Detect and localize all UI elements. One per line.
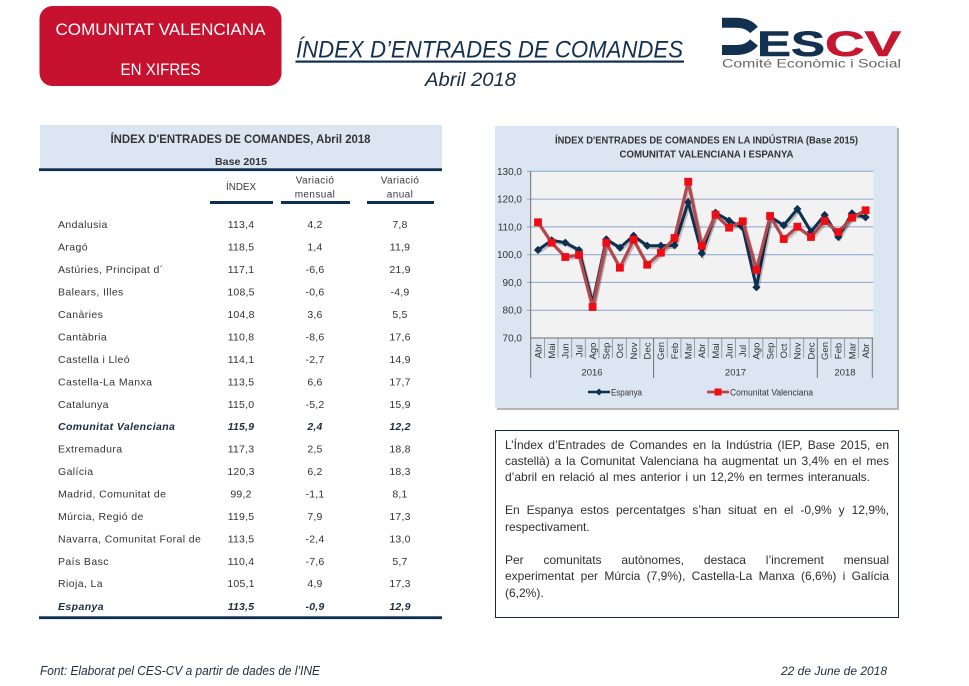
x axis month labels: Dec: [806, 342, 817, 359]
x axis month labels: Ago: [752, 343, 763, 359]
row: Comunitat Valenciana (highlighted): [58, 421, 411, 433]
row: Castella-La Manxa: [58, 376, 411, 388]
x axis month labels: Feb: [834, 343, 845, 359]
row: Rioja: 17,3: [389, 578, 411, 590]
y axis labels: 80,0: [503, 306, 522, 317]
row: Extremadura: 18,8: [389, 444, 411, 456]
row: Balears: 108,5: [227, 286, 255, 298]
x axis month labels: Jul: [574, 345, 585, 357]
row: Andalusia: 113,4: [228, 219, 254, 231]
row: Canàries: 5,5: [392, 309, 408, 321]
series: Comunitat Valenciana: [534, 178, 869, 310]
row: Catalunya: [58, 399, 411, 411]
row: Galícia: 120,3: [227, 466, 255, 478]
y axis labels: 100,0: [497, 250, 522, 261]
row: Espanya (highlighted): 12,9: [389, 601, 411, 613]
row: Múrcia: 7,9: [307, 511, 323, 523]
row: Madrid: 8,1: [392, 489, 408, 501]
x axis month labels: Ago: [588, 343, 599, 359]
row: Espanya (highlighted): [58, 601, 411, 613]
row: Madrid: Madrid, Comunitat de: [58, 489, 166, 501]
row: País Basc: 5,7: [392, 556, 408, 568]
row: Cantàbria: [58, 331, 411, 343]
badge: Comunitat Valenciana en xifres: EN XIFRES: [120, 61, 200, 79]
column headings: anual: [387, 190, 413, 200]
text box: commentary: respectivament.: [505, 520, 590, 534]
x axis month labels: Mai: [547, 343, 558, 359]
x axis month labels: Mar: [684, 343, 694, 359]
row: Navarra: 13,0: [389, 534, 411, 546]
x axis month labels: Mai: [711, 343, 722, 359]
row: Galícia: 6,2: [307, 466, 323, 478]
row: Rioja: 4,9: [307, 578, 323, 590]
row: Castella i Lleó: Castella i Lleó: [58, 354, 130, 366]
y axis labels: 70,0: [503, 334, 522, 344]
row: Astúries: 21,9: [389, 264, 411, 276]
row: Múrcia: Múrcia, Regió de: [58, 511, 144, 523]
row: Espanya (highlighted): Espanya: [58, 601, 104, 613]
row: Andalusia: 7,8: [392, 219, 408, 231]
panel: data table: [39, 125, 442, 619]
row: Andalusia: [58, 219, 408, 231]
row: Catalunya: 115,0: [228, 399, 254, 411]
row: Madrid: 99,2: [230, 489, 252, 501]
row: Múrcia: 17,3: [389, 511, 411, 523]
row: Aragó: Aragó: [58, 242, 88, 254]
row: Astúries: Astúries, Principat d´: [58, 264, 164, 276]
row: Comunitat Valenciana (highlighted): Comunitat Valenciana: [58, 421, 175, 433]
row: Andalusia: 4,2: [307, 219, 323, 231]
row: Castella-La Manxa: 6,6: [307, 376, 323, 388]
row: País Basc: País Basc: [58, 556, 109, 568]
x axis month labels: Abr: [861, 344, 872, 358]
row: Rioja: [58, 578, 411, 590]
row: Navarra: Navarra, Comunitat Foral de: [58, 534, 201, 546]
row: Astúries: -6,6: [306, 264, 324, 276]
column headings: ÍNDEX: [226, 180, 256, 193]
row: Catalunya: 15,9: [389, 399, 411, 411]
table header band: ÍNDEX D'ENTRADES DE COMANDES, Abril 2018: [110, 131, 371, 146]
text box: commentary: (6,2%).: [505, 586, 544, 600]
series: Espanya: [534, 199, 869, 305]
row: Navarra: 113,5: [228, 534, 254, 546]
row: Aragó: 1,4: [307, 242, 323, 254]
x axis month labels: Sep: [602, 343, 613, 359]
row: Madrid: -1,1: [306, 489, 324, 501]
text box: commentary: experimentat per Múrcia (7,9%), Castella-La Manxa (6,6%) i Galícia: [505, 569, 889, 583]
row: Castella i Lleó: 114,1: [228, 354, 254, 366]
y axis labels: 110,0: [498, 222, 522, 233]
y axis labels: [497, 167, 522, 344]
row: Rioja: Rioja, La: [58, 578, 103, 590]
footer: source: Font: Elaborat pel CES-CV a partir de dades de l’INE: [40, 664, 321, 678]
row: Castella-La Manxa: 113,5: [228, 376, 254, 388]
row: Balears: -0,6: [306, 286, 324, 298]
footer: date: 22 de June de 2018: [780, 664, 887, 678]
row: Comunitat Valenciana (highlighted): 12,2: [389, 421, 411, 433]
row: Comunitat Valenciana (highlighted): 2,4: [306, 421, 323, 433]
row: País Basc: -7,6: [306, 556, 324, 568]
text box: commentary: Per comunitats autònomes, destaca l’increment mensual: [505, 553, 889, 567]
chart title: [555, 134, 858, 160]
row: Espanya (highlighted): 113,5: [228, 601, 254, 613]
column headings: Variació: [296, 176, 334, 186]
x axis month labels: Oct: [615, 343, 626, 358]
row: Catalunya: -5,2: [306, 399, 324, 411]
row: Galícia: 18,3: [389, 466, 411, 478]
text box: commentary: d’abril en relació al mes anterior i un 12,2% en termes interanuals.: [505, 470, 870, 484]
row: Cantàbria: 17,6: [389, 331, 411, 343]
row: Múrcia: [58, 511, 411, 523]
row: Navarra: -2,4: [306, 534, 324, 546]
plot area: [527, 171, 873, 378]
x axis month labels: Feb: [670, 343, 681, 359]
row: Extremadura: 2,5: [307, 444, 323, 456]
x axis month labels: Sep: [765, 343, 776, 359]
legend: Comunitat Valenciana: Comunitat Valenciana: [730, 387, 814, 398]
row: Canàries: 104,8: [227, 309, 255, 321]
logo: CES CV: CV: [825, 25, 902, 64]
y axis labels: 130,0: [497, 167, 522, 178]
table header band: [39, 125, 442, 171]
row: Galícia: [58, 466, 411, 478]
badge: Comunitat Valenciana en xifres: COMUNITAT VALENCIANA: [56, 21, 266, 39]
x axis month labels: Nov: [793, 342, 804, 359]
legend: Espanya: Espanya: [611, 387, 643, 398]
row: Castella i Lleó: [58, 354, 411, 366]
table header band: Base 2015: [215, 157, 267, 168]
row: Cantàbria: 110,8: [228, 331, 254, 343]
x axis month labels: Jun: [724, 343, 735, 359]
x axis month labels: Oct: [779, 343, 790, 358]
text box: commentary: En Espanya estos percentatges s’han situat en el -0,9% y 12,9%,: [505, 503, 889, 517]
row: Galícia: Galícia: [58, 466, 93, 478]
row: Navarra: [58, 534, 411, 546]
row: Canàries: 3,6: [307, 309, 323, 321]
row: Castella i Lleó: 14,9: [389, 354, 411, 366]
text box: commentary: castellà) a la Comunitat Valenciana ha augmentat un 3,4% en el mes: [505, 454, 889, 468]
row: Madrid: [58, 489, 408, 501]
table bottom rule: [39, 616, 442, 619]
row: Aragó: 118,5: [228, 242, 254, 254]
text box: commentary: L’Índex d’Entrades de Comandes en la Indústria (IEP, Base 2015, en: [505, 438, 889, 452]
chart title: COMUNITAT VALENCIANA I ESPANYA: [620, 148, 794, 160]
badge: Comunitat Valenciana en xifres: [40, 6, 282, 86]
x axis year labels: 2018: [834, 368, 856, 378]
column headings: [210, 176, 434, 204]
x axis month labels: Abr: [697, 344, 708, 358]
column headings: Variació: [381, 176, 419, 186]
row: Astúries: 117,1: [228, 264, 254, 276]
row: Andalusia: Andalusia: [58, 219, 108, 231]
row: País Basc: 110,4: [228, 556, 254, 568]
row: Cantàbria: -8,6: [306, 331, 324, 343]
text box: commentary: [495, 430, 899, 618]
row: Balears: -4,9: [391, 286, 409, 298]
row: Aragó: 11,9: [390, 242, 410, 254]
x axis month labels: Dec: [642, 342, 654, 359]
row: Balears: [58, 286, 409, 298]
x axis month labels: Jun: [561, 343, 572, 359]
y axis labels: 90,0: [503, 278, 522, 289]
row: Aragó: [58, 242, 410, 254]
x axis month labels: Gen: [820, 342, 831, 360]
x axis month labels: Mar: [847, 343, 858, 359]
logo: CES CV: [722, 23, 902, 70]
row: Balears: Balears, Illes: [58, 286, 124, 298]
row: Canàries: Canàries: [58, 309, 103, 321]
row: País Basc: [58, 556, 408, 568]
logo: CES CV: ES: [757, 25, 825, 64]
row: Múrcia: 119,5: [228, 511, 254, 523]
legend: Espanya: [588, 387, 643, 398]
x axis month labels: [533, 342, 872, 360]
row: Extremadura: Extremadura: [58, 444, 123, 456]
x axis month labels: Jul: [738, 345, 749, 357]
row: Extremadura: 117,3: [228, 444, 254, 456]
row: Castella-La Manxa: 17,7: [389, 376, 411, 388]
y axis labels: 120,0: [497, 195, 522, 206]
x axis month labels: Gen: [656, 342, 667, 360]
x axis year labels: 2016: [581, 368, 603, 378]
row: Catalunya: Catalunya: [58, 399, 109, 411]
subtitle: date: Abril 2018: [424, 69, 516, 91]
panel: line chart: [495, 126, 899, 410]
column headings: mensual: [295, 190, 335, 200]
row: Canàries: [58, 309, 408, 321]
row: Comunitat Valenciana (highlighted): 115,9: [228, 421, 254, 433]
x axis year labels: 2017: [725, 368, 746, 378]
row: Castella-La Manxa: Castella-La Manxa: [58, 376, 152, 388]
x axis month labels: Nov: [629, 342, 640, 359]
row: Cantàbria: Cantàbria: [58, 331, 107, 343]
row: Astúries: [58, 264, 411, 276]
row: Castella i Lleó: -2,7: [306, 354, 324, 366]
row: Espanya (highlighted): -0,9: [306, 601, 324, 613]
x axis month labels: Abr: [533, 344, 544, 358]
row: Extremadura: [58, 444, 411, 456]
title: ÍNDEX D’ENTRADES DE COMANDES: [296, 36, 683, 64]
chart title: ÍNDEX D'ENTRADES DE COMANDES EN LA INDÚSTRIA (Base 2015): [555, 134, 858, 146]
logo: CES CV: Comité Econòmic i Social: [722, 56, 901, 70]
x axis year labels: [581, 368, 856, 378]
row: Rioja: 105,1: [227, 578, 255, 590]
